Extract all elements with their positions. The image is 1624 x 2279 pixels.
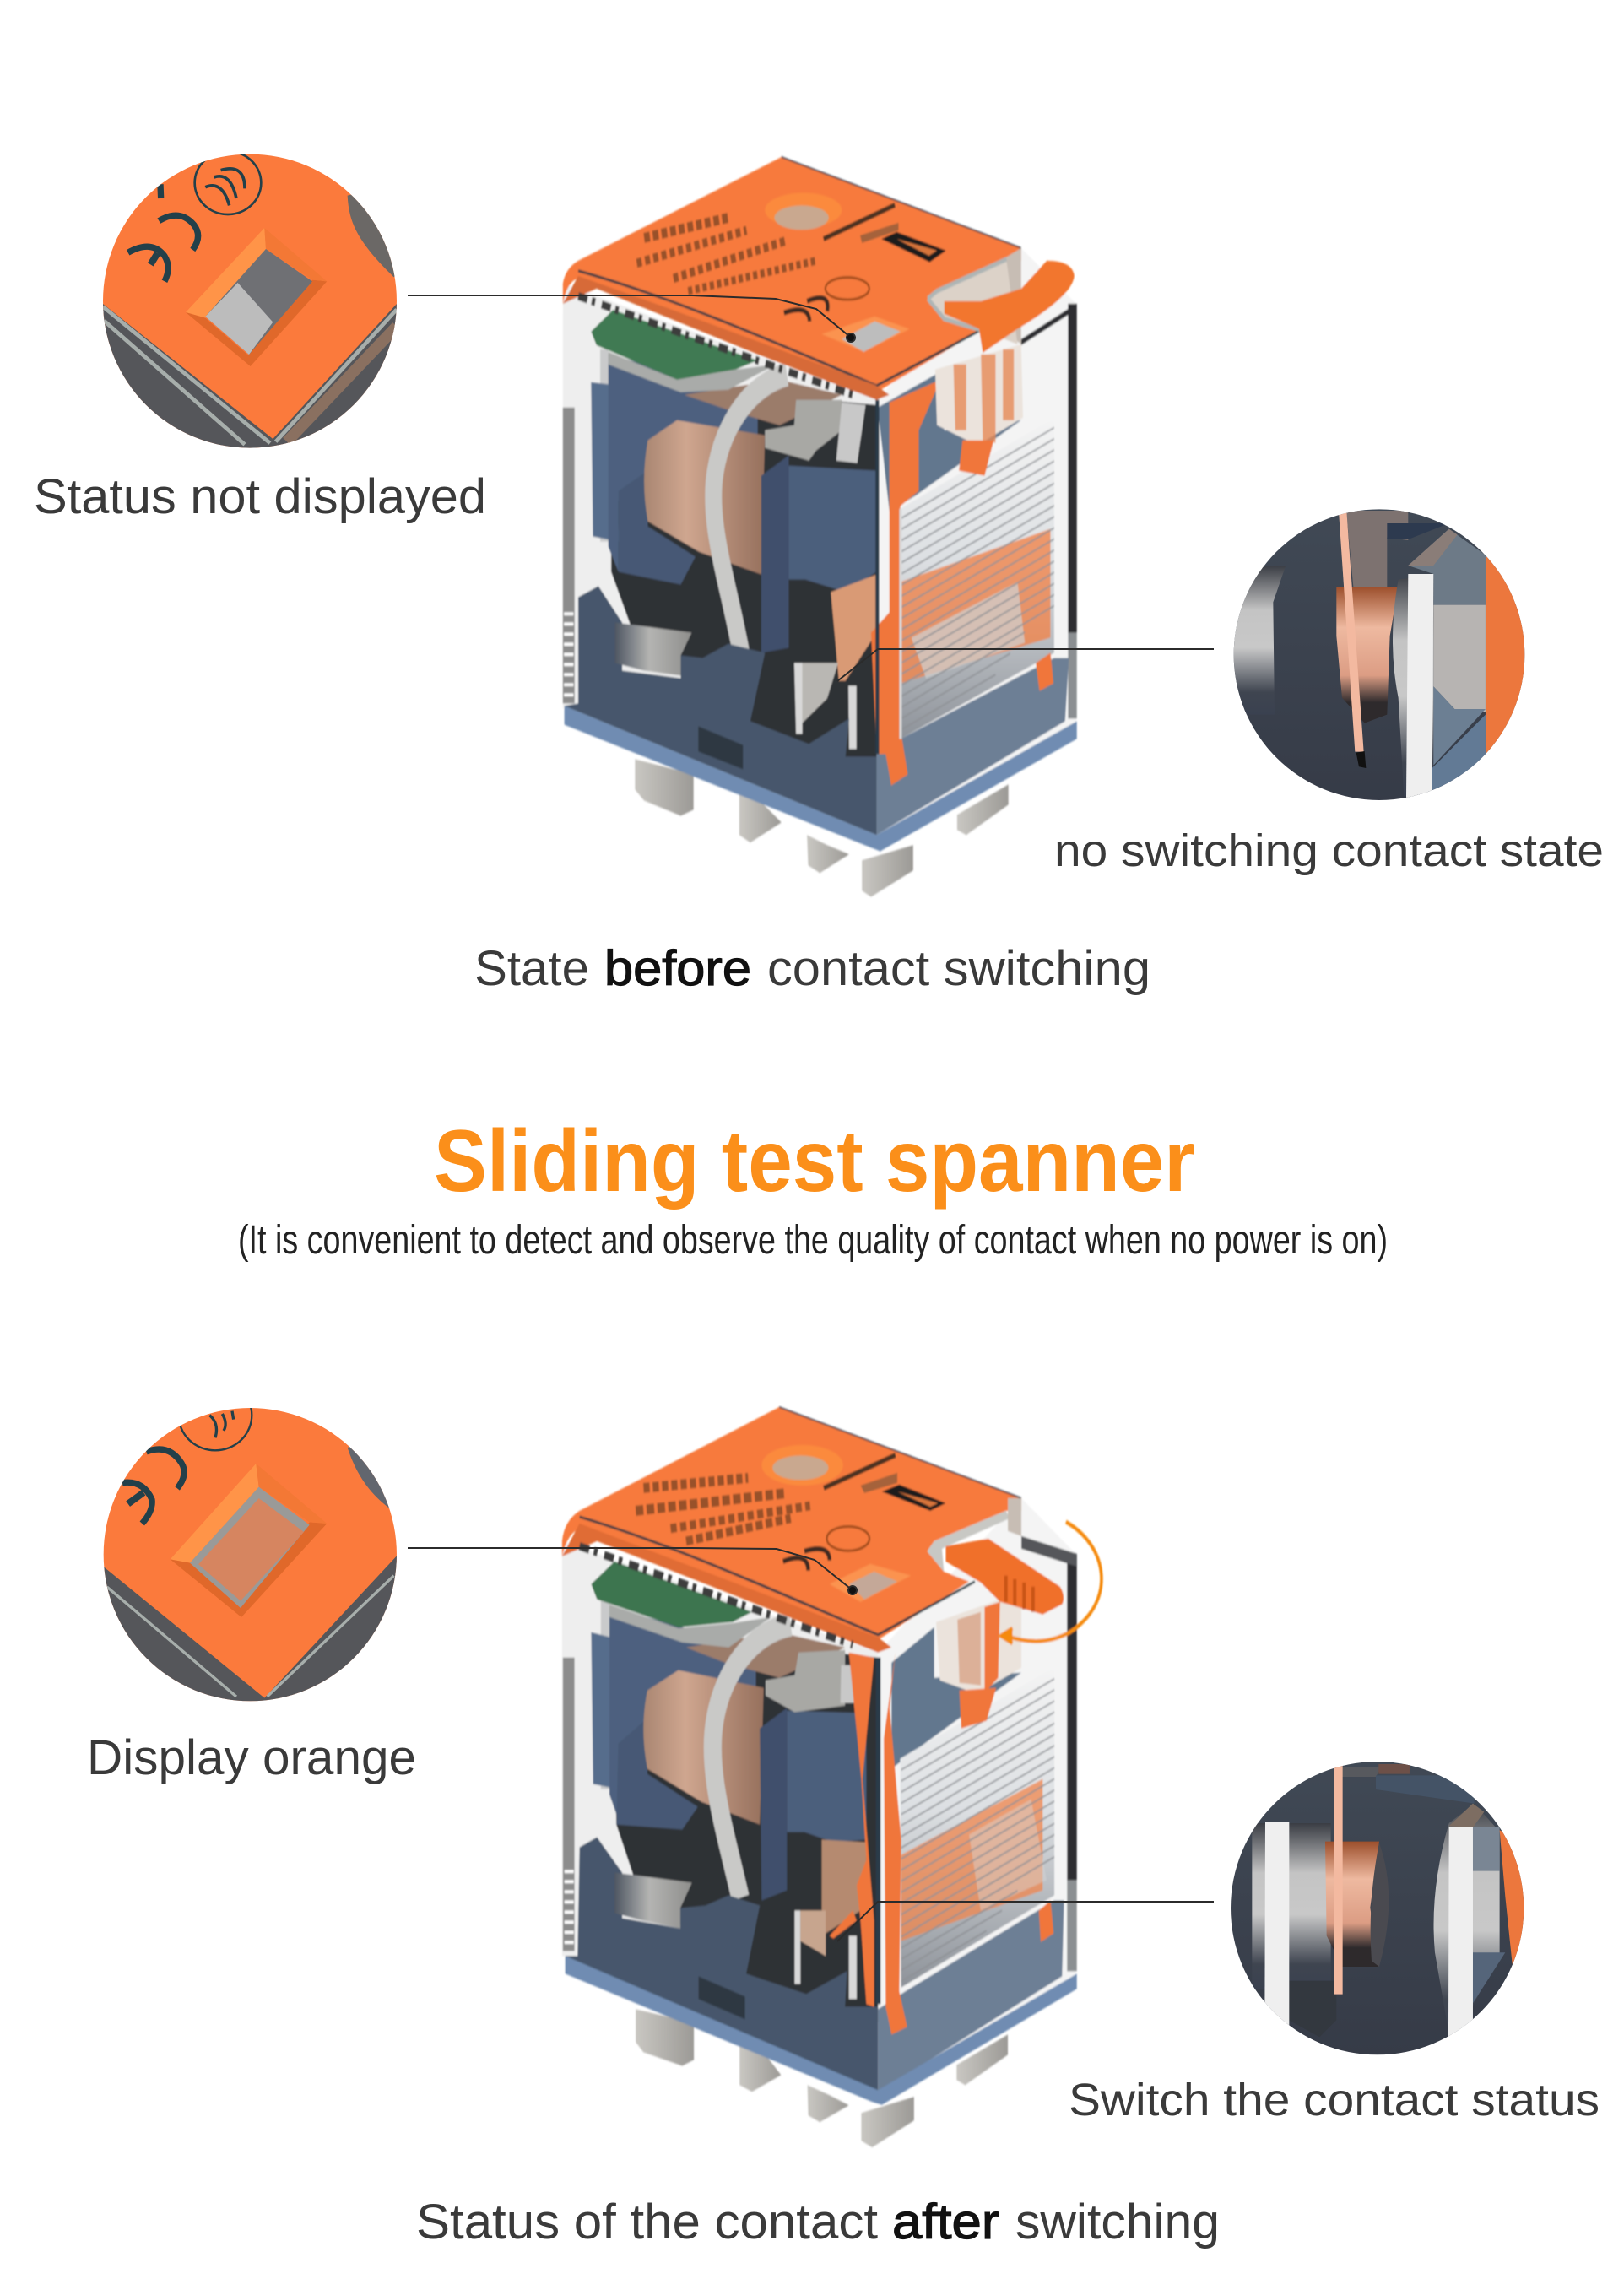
coil (644, 420, 765, 575)
indicator lamp (765, 193, 842, 230)
clear switch housing (935, 344, 1023, 446)
printed marks (636, 1478, 810, 1541)
caption: no switching contact state: no switching contact state (1054, 826, 1604, 876)
clear case (563, 284, 877, 759)
lower body (566, 1838, 878, 2092)
certification marks (784, 278, 869, 322)
leader line: contact (837, 1902, 1214, 1941)
printed marks (636, 218, 816, 291)
caption: display orange: Display orange (87, 1730, 416, 1785)
coil (643, 1670, 764, 1825)
terminals (635, 759, 1009, 896)
circle: no switching contact state (1234, 509, 1524, 800)
heading: status of the contact after switching (416, 2195, 1220, 2249)
rotation arrow (1001, 1522, 1102, 1643)
clear case (562, 1541, 878, 2011)
heading: state before contact switching: State (474, 941, 589, 996)
caption: status not displayed: Status not displayed (34, 469, 486, 524)
status window (830, 1564, 911, 1602)
logo marks (824, 1455, 946, 1511)
orange actuator strips (849, 1653, 874, 2006)
interior dark cavity (611, 380, 877, 769)
yoke (591, 1632, 619, 1789)
copper plate (831, 575, 877, 680)
caption: switch the contact status: Switch the contact status (1069, 2075, 1600, 2125)
logo marks (824, 205, 946, 263)
circuit board (591, 310, 758, 380)
wire (712, 1625, 791, 1897)
clear switch housing (936, 1592, 1021, 1694)
status window (821, 317, 910, 352)
blue side wall (878, 370, 1021, 512)
lip fringe (580, 1546, 853, 1645)
lower body (565, 586, 877, 835)
heading: state before contact switching: before (604, 941, 751, 996)
circle: display orange (103, 1408, 397, 1702)
leader line: contact (837, 649, 1214, 681)
wire (713, 375, 787, 652)
heading: status of the contact after switching: switching (1015, 2195, 1220, 2249)
blue side wall (891, 1627, 1021, 1769)
panel: status after switching (84, 1380, 1600, 2249)
relay after switching (562, 1407, 1102, 2147)
heading: status of the contact after switching: after (892, 2195, 999, 2249)
panel: state before contact switching (34, 135, 1604, 996)
test lever (945, 261, 1075, 353)
indicator lamp (761, 1445, 843, 1486)
circuit board (591, 1562, 752, 1627)
base plate (565, 706, 1077, 851)
top cover (562, 1407, 1021, 1640)
heading: status of the contact after switching: Status of the contact (416, 2195, 878, 2249)
cooling fins (900, 1667, 1054, 1988)
heading: state before contact switching (474, 941, 1150, 996)
right block (787, 1711, 866, 1843)
right block (788, 466, 877, 593)
yoke (591, 382, 620, 542)
lip fringe (578, 296, 853, 395)
top cover (563, 157, 1021, 392)
base plate (566, 1956, 1077, 2105)
interior dark cavity (613, 1627, 878, 2022)
circle: switch the contact status (1231, 1762, 1524, 2054)
copper plate (822, 1840, 866, 1935)
test lever (946, 1539, 1064, 1615)
leader line: status window (408, 1548, 857, 1594)
orange actuator strip (871, 380, 940, 786)
circle: status not displayed (103, 154, 397, 448)
certification marks (783, 1526, 869, 1571)
relay before switching (563, 157, 1077, 896)
terminals (636, 2009, 1008, 2147)
heading: state before contact switching: contact switching (767, 941, 1150, 996)
leader line: status window (408, 295, 855, 342)
title: sliding test spanner: Sliding test spanner (434, 1112, 1195, 1210)
cooling fins (901, 418, 1054, 739)
